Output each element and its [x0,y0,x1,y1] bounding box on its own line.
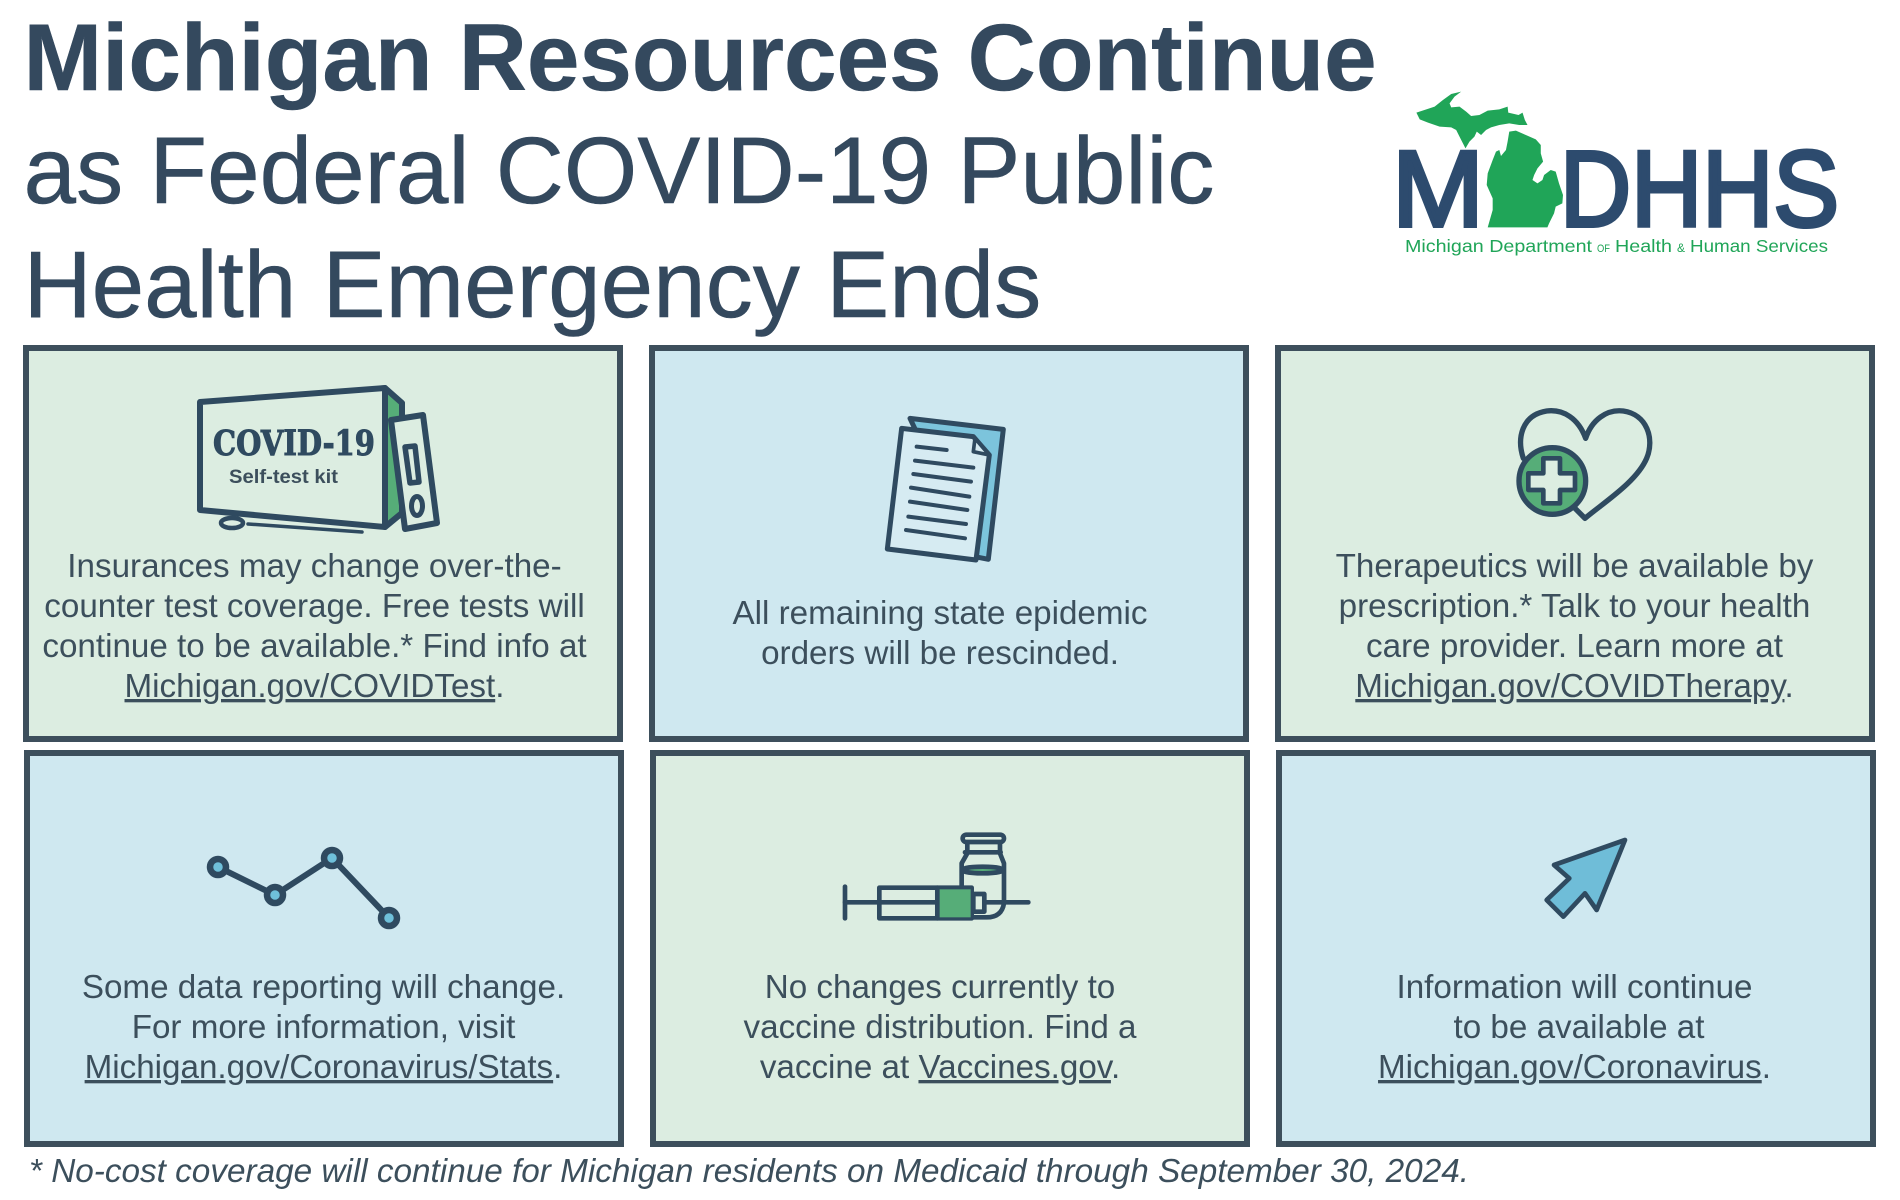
icon: COVID-19 self-test kit: COVID-19 [213,423,375,464]
text block: All remaining state epidemic [732,595,1148,632]
footnote: * No-cost coverage will continue for Michigan residents on Medicaid through September 30, 2024. [29,1153,1469,1190]
text block [42,548,587,705]
panel: epidemic orders [652,348,1246,739]
text block [1378,969,1771,1086]
text block: Insurances may change over-the- [67,548,562,585]
text block: Michigan.gov/COVIDTest. [125,668,504,705]
title: as Federal COVID-19 Public [24,119,1214,224]
logo subtitle: OF [1597,243,1610,255]
title: Health Emergency Ends [24,233,1041,338]
text block [1336,548,1814,705]
panel: therapeutics [1278,348,1872,739]
panel: vaccine [653,753,1247,1144]
title [24,6,1377,338]
text block [82,969,565,1086]
text block: For more information, visit [132,1009,515,1046]
logo: MDHHS [1392,92,1839,256]
text block: Michigan.gov/Coronavirus. [1378,1049,1771,1086]
icon: line chart [210,850,397,926]
logo subtitle: Michigan Department [1405,236,1592,256]
icon: heart with medical cross [1519,411,1650,518]
logo letters: DHHS [1560,128,1839,249]
logo subtitle: Health [1615,236,1672,256]
text block: vaccine distribution. Find a [744,1009,1137,1046]
text block: prescription.* Talk to your health [1339,588,1810,625]
text block [744,969,1137,1086]
title: Michigan Resources Continue [24,6,1377,111]
icon: documents [887,418,1003,560]
text block: Some data reporting will change. [82,969,565,1006]
text block: continue to be available.* Find info at [42,628,587,665]
logo subtitle: & [1677,241,1685,255]
icon: Michigan state map [1416,92,1563,227]
panel: data reporting [27,753,621,1144]
text block: orders will be rescinded. [761,635,1119,672]
logo subtitle: Human Services [1690,236,1828,256]
text block: care provider. Learn more at [1366,628,1783,665]
text block [732,595,1148,672]
logo subtitle [1405,236,1828,256]
icon: cursor arrow [1547,840,1625,917]
text block: No changes currently to [765,969,1115,1006]
icon: COVID-19 self-test kit: Self-test kit [229,467,339,488]
text block: Therapeutics will be available by [1336,548,1814,585]
panel: test coverage [26,348,620,739]
icon: COVID-19 self-test kit [200,388,437,532]
text block: counter test coverage. Free tests will [44,588,585,625]
panel: information [1279,753,1873,1144]
text block: vaccine at Vaccines.gov. [760,1049,1120,1086]
logo letters: M [1392,128,1484,249]
icon: syringe and vial [845,835,1028,918]
text block: Michigan.gov/COVIDTherapy. [1355,668,1794,705]
text block: Information will continue [1396,969,1753,1006]
text block: to be available at [1454,1009,1704,1046]
logo letters [1392,128,1839,249]
text block: Michigan.gov/Coronavirus/Stats. [85,1049,562,1086]
